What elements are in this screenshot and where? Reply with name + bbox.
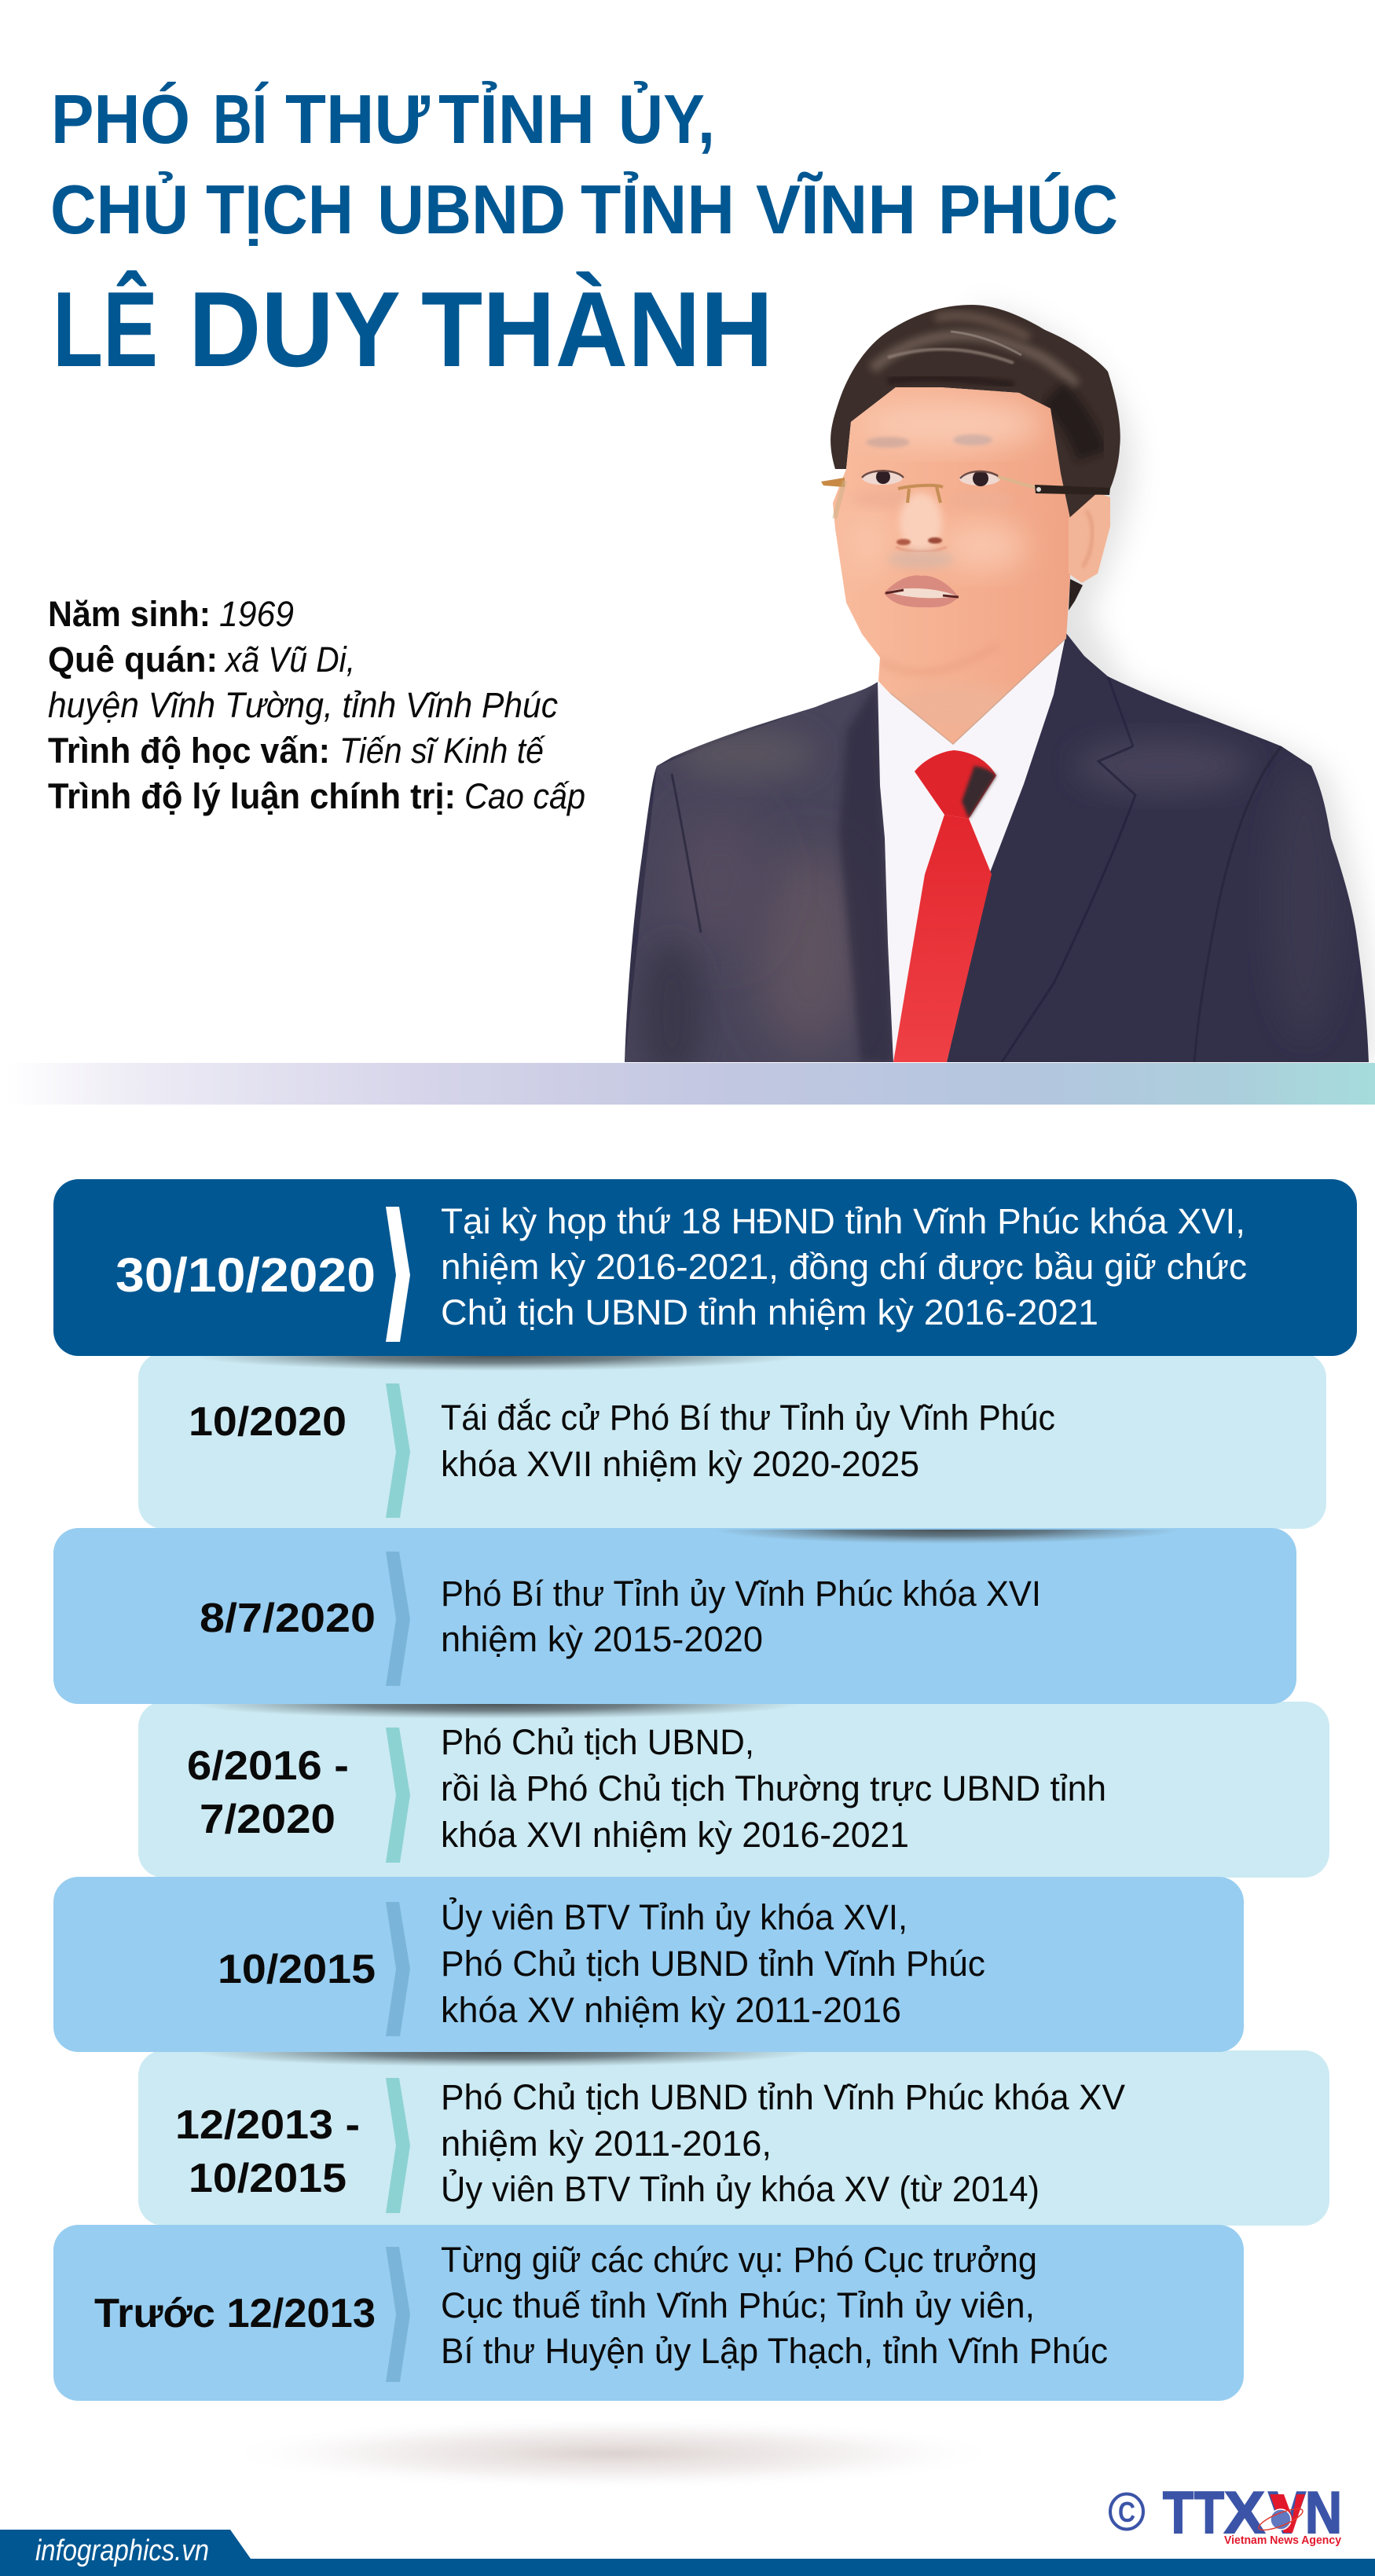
title: TỈNH: [438, 80, 595, 158]
row 6: 12/2013 - 10/2015: 10/2015: [189, 2156, 346, 2201]
eyes: [862, 471, 903, 485]
row 2: 10/2020: [189, 1383, 1055, 1518]
row 5: 10/2015: khóa XV nhiệm kỳ 2011-2016: [441, 1990, 901, 2030]
biography details: Năm sinh:: [48, 594, 211, 634]
row 3: 8/7/2020: [200, 1552, 1041, 1686]
title: CHỦ: [50, 170, 189, 248]
row 7: Trước 12/2013: [94, 2240, 1108, 2382]
logo: TTXVN: Vietnam News Agency: [1224, 2534, 1342, 2547]
row 4: 6/2016 - 7/2020: rồi là Phó Chủ tịch Thường trực UBND tỉnh: [441, 1768, 1106, 1808]
row 3 background: [53, 1528, 1296, 1704]
gradient strip: [6, 1063, 1375, 1105]
row 6: 12/2013 - 10/2015: nhiệm kỳ 2011-2016,: [441, 2123, 772, 2164]
row 7 background: [53, 2225, 1244, 2401]
row 2: 10/2020: 10/2020: [189, 1399, 346, 1445]
row 2 background: [138, 1353, 1326, 1529]
face and neck: [833, 387, 1110, 745]
title: THÀNH: [421, 269, 773, 389]
row 7: Trước 12/2013: Từng giữ các chức vụ: Phó Cục trưởng: [441, 2240, 1037, 2280]
title: PHÚC: [938, 170, 1118, 248]
row 1: 30/10/2020: [116, 1201, 1247, 1342]
row 5 background: [53, 1877, 1244, 2052]
title: UBND: [377, 170, 566, 248]
row 4: 6/2016 - 7/2020: 6/2016 -: [187, 1743, 349, 1789]
row 7: Trước 12/2013: Cục thuế tỉnh Vĩnh Phúc; Tỉnh ủy viên,: [441, 2285, 1035, 2325]
biography details: [48, 594, 585, 816]
row 2: 10/2020: khóa XVII nhiệm kỳ 2020-2025: [441, 1444, 919, 1484]
row 1: 30/10/2020: Chủ tịch UBND tỉnh nhiệm kỳ 2016-2021: [441, 1292, 1098, 1332]
row 3: 8/7/2020: 8/7/2020: [200, 1596, 376, 1641]
title: VĨNH: [756, 170, 916, 248]
title: LÊ: [53, 269, 158, 389]
mouth: [884, 575, 959, 607]
glasses: [821, 477, 1110, 518]
row 4: 6/2016 - 7/2020: [187, 1722, 1106, 1863]
biography details: Tiến sĩ Kinh tế: [339, 731, 546, 771]
row 7: Trước 12/2013: Bí thư Huyện ủy Lập Thạch, tỉnh Vĩnh Phúc: [441, 2331, 1108, 2371]
title: TỊCH: [206, 170, 354, 248]
copyright mark: [1110, 2494, 1143, 2530]
row shadows: [194, 1341, 1179, 2067]
timeline: [53, 1179, 1357, 2401]
row 6: 12/2013 - 10/2015: Phó Chủ tịch UBND tỉnh Vĩnh Phúc khóa XV: [441, 2077, 1125, 2117]
biography details: Trình độ học vấn:: [48, 731, 330, 771]
footer bar: [0, 2530, 1375, 2576]
title: [50, 80, 1118, 389]
biography details: xã Vũ Di,: [224, 639, 355, 680]
skin shading: [860, 401, 1041, 448]
row 3: 8/7/2020: Phó Bí thư Tỉnh ủy Vĩnh Phúc khóa XVI: [441, 1574, 1041, 1614]
row 1 background: [53, 1179, 1357, 1356]
biography details: Trình độ lý luận chính trị:: [48, 776, 456, 816]
logo: TTXVN: N: [1305, 2479, 1342, 2545]
title: ỦY,: [618, 80, 715, 158]
row 4: 6/2016 - 7/2020: khóa XVI nhiệm kỳ 2016-2021: [441, 1815, 909, 1855]
row 1: 30/10/2020: nhiệm kỳ 2016-2021, đồng chí được bầu giữ chức: [441, 1247, 1247, 1287]
portrait soft shadow: [974, 308, 1375, 1062]
row 2: 10/2020: Tái đắc cử Phó Bí thư Tỉnh ủy Vĩnh Phúc: [441, 1398, 1055, 1438]
row 5: 10/2015: [218, 1897, 985, 2036]
row 7: Trước 12/2013: Trước 12/2013: [94, 2291, 376, 2336]
row 4: 6/2016 - 7/2020: 7/2020: [200, 1797, 336, 1842]
footer site label: infographics.vn: [35, 2534, 209, 2567]
row 1: 30/10/2020: 30/10/2020: [116, 1248, 376, 1302]
jacket: [625, 633, 1369, 1084]
logo: TTXVN: T: [1194, 2479, 1224, 2545]
row 4 background: [138, 1702, 1329, 1878]
row 6: 12/2013 - 10/2015: Ủy viên BTV Tỉnh ủy khóa XV (từ 2014): [441, 2169, 1040, 2209]
row 5: 10/2015: Phó Chủ tịch UBND tỉnh Vĩnh Phúc: [441, 1944, 985, 1984]
shirt: [878, 633, 1066, 1062]
logo: TTXVN: [1110, 2479, 1342, 2547]
ear: [1069, 493, 1110, 583]
row 6 background: [138, 2050, 1329, 2226]
nose: [900, 493, 942, 552]
biography details: 1969: [219, 594, 294, 634]
biography details: huyện Vĩnh Tường, tỉnh Vĩnh Phúc: [48, 685, 558, 725]
row 1: 30/10/2020: Tại kỳ họp thứ 18 HĐND tỉnh Vĩnh Phúc khóa XVI,: [441, 1201, 1245, 1241]
title: BÍ: [213, 80, 269, 158]
title: TỈNH: [581, 170, 735, 248]
row 5: 10/2015: Ủy viên BTV Tỉnh ủy khóa XVI,: [441, 1897, 908, 1937]
copyright mark: C: [1118, 2496, 1135, 2528]
portrait: [625, 305, 1375, 1084]
title: DUY: [189, 269, 401, 389]
moustache tint: [888, 550, 954, 569]
logo: TTXVN: T: [1163, 2479, 1194, 2545]
title: PHÓ: [51, 80, 190, 158]
necktie: [893, 750, 996, 1062]
logo: TTXVN: X: [1224, 2479, 1265, 2545]
row 6: 12/2013 - 10/2015: 12/2013 -: [175, 2102, 360, 2148]
floor shadow: [220, 2417, 1006, 2490]
row 6: 12/2013 - 10/2015: [175, 2077, 1125, 2213]
hair: [830, 305, 1120, 518]
row 4: 6/2016 - 7/2020: Phó Chủ tịch UBND,: [441, 1722, 754, 1762]
row 5: 10/2015: 10/2015: [218, 1947, 376, 1992]
title: THƯ: [285, 80, 430, 158]
biography details: Cao cấp: [464, 776, 585, 816]
biography details: Quê quán:: [48, 639, 218, 680]
logo: TTXVN: V: [1268, 2479, 1306, 2545]
row 3: 8/7/2020: nhiệm kỳ 2015-2020: [441, 1619, 763, 1659]
eyebrows: [866, 437, 910, 448]
